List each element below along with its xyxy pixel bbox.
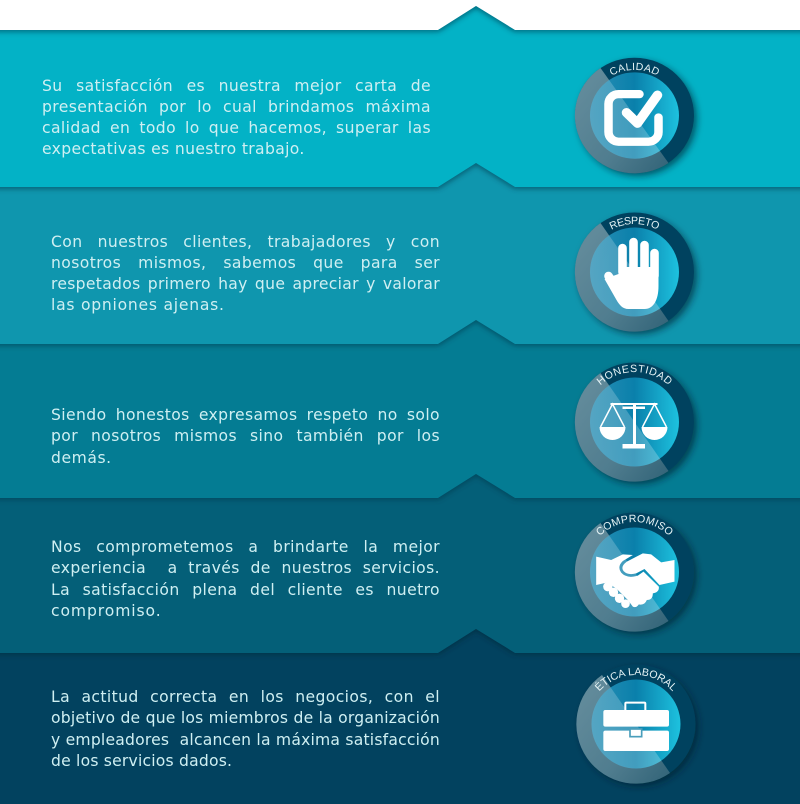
- panel: honestidad: [0, 320, 800, 498]
- icon: respeto badge: RESPETO: [609, 216, 659, 230]
- text: etica laboral: y empleadores alcancen la máxima satisfacción: [51, 731, 440, 749]
- text: etica laboral: objetivo de que los miembros de la organización: [51, 709, 440, 727]
- text: respeto: las opniones ajenas.: [51, 296, 225, 314]
- icon: respeto badge: [574, 211, 702, 339]
- text: compromiso: compromiso.: [51, 602, 162, 620]
- text: etica laboral: de los servicios dados.: [51, 752, 232, 770]
- text: honestidad: Siendo honestos expresamos respeto no solo: [51, 406, 440, 424]
- icon: honestidad badge: [574, 362, 701, 488]
- text: calidad: calidad en todo lo que hacemos, superar las: [42, 119, 431, 137]
- icon: etica laboral badge: ÉTICA LABORAL: [594, 668, 675, 692]
- text: respeto: Con nuestros clientes, trabajadores y con: [51, 232, 440, 250]
- text: etica laboral: La actitud correcta en los negocios, con el: [51, 688, 440, 706]
- icon: compromiso badge: COMPROMISO: [596, 514, 672, 534]
- text: honestidad: por nosotros mismos sino también por los: [51, 427, 440, 445]
- panel: respeto: [0, 163, 800, 344]
- text: honestidad: [51, 406, 440, 467]
- text: compromiso: [51, 538, 440, 620]
- panel: calidad: [0, 6, 800, 187]
- text: honestidad: demás.: [51, 449, 112, 467]
- text: etica laboral: [51, 688, 440, 770]
- text: respeto: nosotros mismos, sabemos que para ser: [51, 254, 440, 272]
- text: respeto: [51, 232, 440, 314]
- icon: calidad badge: CALIDAD: [610, 62, 659, 74]
- text: calidad: Su satisfacción es nuestra mejor carta de: [42, 76, 431, 94]
- text: respeto: respetados primero hay que apreciar y valorar: [51, 275, 440, 293]
- text: compromiso: Nos comprometemos a brindarte la mejor: [51, 538, 440, 556]
- icon: compromiso badge: [574, 512, 701, 638]
- text: compromiso: experiencia a través de nuestros servicios.: [51, 559, 440, 577]
- icon: etica laboral badge: [576, 665, 701, 789]
- icon: honestidad badge: HONESTIDAD: [596, 364, 672, 385]
- text: compromiso: La satisfacción plena del cliente es nuetro: [51, 581, 440, 599]
- text: calidad: presentación por lo cual brindamos máxima: [42, 98, 431, 116]
- text: calidad: [42, 76, 431, 158]
- icon: calidad badge: [573, 56, 702, 181]
- panel: etica laboral: [0, 629, 800, 804]
- text: calidad: expectativas es nuestro trabajo.: [42, 140, 305, 158]
- panel: compromiso: [0, 474, 800, 653]
